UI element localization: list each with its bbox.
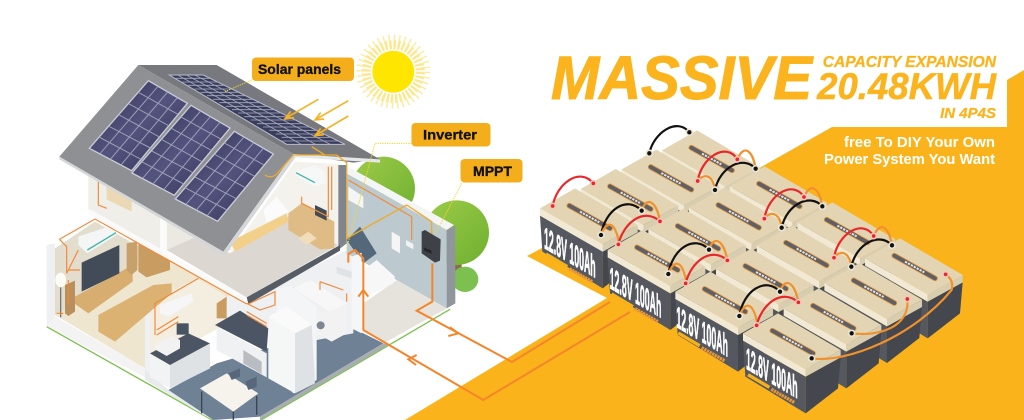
sun [361, 40, 425, 104]
trees [352, 157, 489, 292]
yellow background shape [405, 70, 1024, 420]
headline: IN 4P4S [940, 105, 996, 122]
label: MPPT [460, 159, 522, 182]
headline [551, 44, 998, 122]
indoor orange wiring [57, 167, 412, 335]
orange power lines to the battery [348, 250, 630, 400]
house illustration [47, 65, 630, 420]
battery row 4 [662, 130, 963, 338]
battery row 2 [581, 169, 881, 388]
headline: 20.48KWH [816, 66, 998, 107]
headline: CAPACITY EXPANSION [823, 54, 997, 71]
roof rear solar panels [169, 75, 345, 144]
subheading: free To DIY Your Own [844, 134, 995, 151]
battery row 3 [621, 150, 922, 363]
door column and bedroom [337, 187, 413, 333]
living room furniture [55, 225, 227, 342]
label: MPPT: MPPT [473, 163, 512, 179]
label: Solar panels [252, 58, 354, 81]
battery row 1 [540, 188, 841, 413]
subheading: Power System You Want [824, 151, 995, 168]
roof [59, 65, 380, 255]
roof front solar panels [89, 81, 273, 221]
label: Solar panels: Solar panels [258, 61, 341, 77]
ground lines [47, 309, 450, 420]
upper floor [88, 162, 347, 304]
battery front labels [544, 221, 798, 406]
headline: MASSIVE [551, 44, 814, 112]
subheading [824, 134, 995, 168]
battery cables [550, 126, 952, 361]
MPPT controller box [422, 230, 441, 263]
kitchen [150, 280, 347, 420]
battery bank [540, 126, 963, 413]
dotted label leaders [225, 80, 462, 248]
yellow roof cable [265, 147, 432, 238]
lower floor rooms [47, 166, 455, 420]
label: Inverter [412, 123, 490, 146]
label: Inverter: Inverter [423, 126, 478, 142]
sun rays arrows [285, 99, 348, 136]
